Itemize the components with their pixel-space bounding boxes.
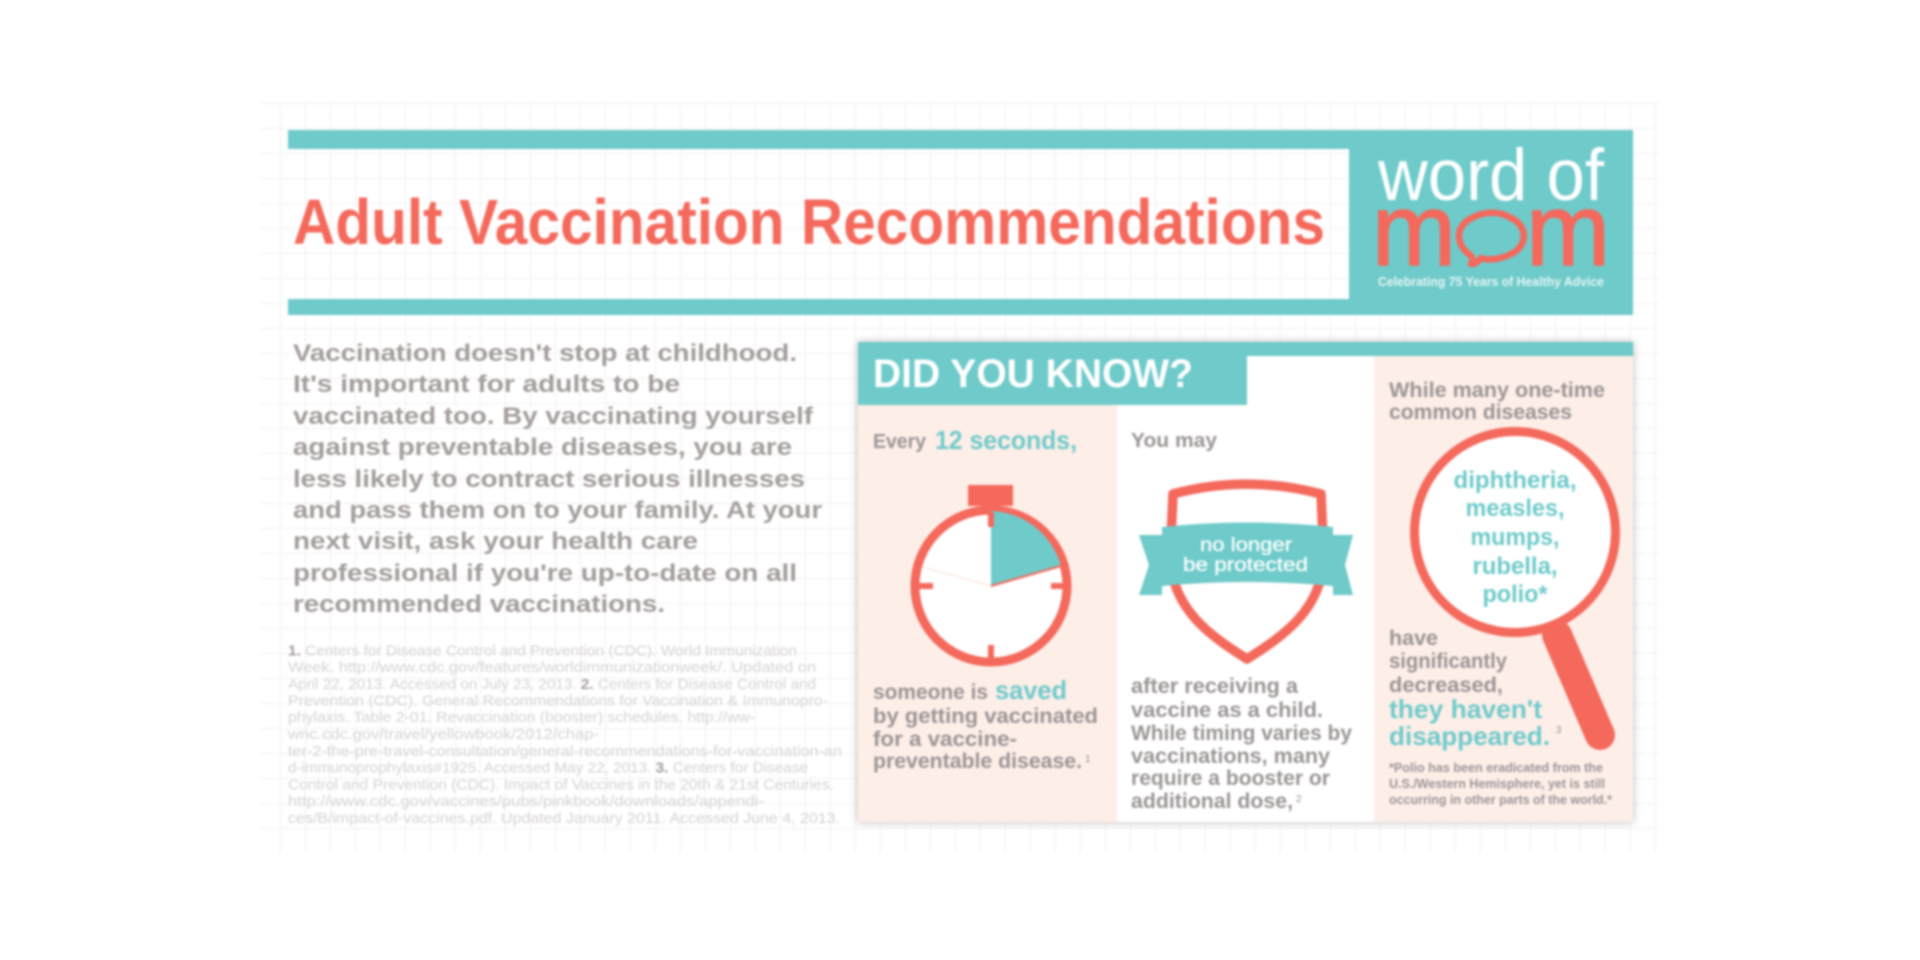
- column: diseases: have: [1389, 627, 1438, 650]
- column: diseases: they haven't: [1389, 694, 1542, 724]
- column: 12 seconds: someone is: [873, 681, 988, 704]
- column: 12 seconds: [858, 405, 1117, 822]
- header band: [288, 130, 1633, 315]
- logo: word of mom: [1372, 135, 1610, 289]
- column: booster: 2: [1296, 794, 1302, 805]
- intro paragraph: less likely to contract serious illnesses: [293, 466, 805, 493]
- references: ter-2-the-pre-travel-consultation/general-recommendations-for-vaccination-an: [288, 744, 842, 760]
- column: booster: require a booster or: [1131, 767, 1330, 790]
- column: 12 seconds: preventable disease.: [873, 750, 1082, 773]
- column: 12 seconds: saved: [995, 675, 1067, 705]
- logo: word of mom: Celebrating 75 Years of Healthy Advice: [1378, 275, 1604, 289]
- column: booster: While timing varies by: [1131, 722, 1352, 745]
- references: ces/B/impact-of-vaccines.pdf. Updated January 2011. Accessed June 4, 2013.: [288, 811, 840, 827]
- icon: magnifying glass: measles,: [1466, 495, 1564, 522]
- column: diseases: While many one-time: [1389, 379, 1605, 402]
- icon: magnifying glass: rubella,: [1472, 553, 1558, 580]
- intro paragraph: vaccinated too. By vaccinating yourself: [293, 403, 814, 430]
- icon: magnifying glass: polio*: [1482, 581, 1548, 608]
- logo: word of mom: m: [1372, 173, 1456, 287]
- references: http://www.cdc.gov/vaccines/pubs/pinkbook/downloads/appendi-: [288, 794, 764, 810]
- icon: shield with ribbon: be protected: [1183, 555, 1308, 576]
- intro paragraph: recommended vaccinations.: [293, 591, 665, 618]
- title: Adult Vaccination Recommendations: [293, 186, 1325, 258]
- column: booster: vaccine as a child.: [1131, 699, 1323, 722]
- references: wnc.cdc.gov/travel/yellowbook/2012/chap-: [287, 727, 599, 743]
- references: Week. http://www.cdc.gov/features/worldimmunizationweek/. Updated on: [288, 660, 816, 676]
- column: booster: additional dose,: [1131, 790, 1293, 813]
- references: April 22, 2013. Accessed on July 23, 2013. 2. Centers for Disease Control and: [288, 677, 816, 693]
- intro paragraph: against preventable diseases, you are: [293, 434, 792, 461]
- column: booster: You may: [1131, 430, 1218, 452]
- heading tab: [858, 342, 1633, 405]
- panel: did you know: [858, 342, 1633, 822]
- icon: shield with ribbon: no longer: [1200, 535, 1293, 556]
- icon: magnifying glass: mumps,: [1470, 524, 1560, 551]
- column: diseases: common diseases: [1389, 401, 1572, 424]
- logo: word of mom: m: [1526, 173, 1610, 287]
- references: [287, 644, 842, 827]
- column: booster: after receiving a: [1131, 675, 1298, 698]
- column: diseases: decreased,: [1389, 674, 1503, 697]
- column: diseases: [1374, 356, 1633, 822]
- column: 12 seconds: 12 seconds,: [935, 425, 1077, 455]
- column: 12 seconds: 1: [1085, 754, 1091, 765]
- intro paragraph: and pass them on to your family. At your: [293, 497, 822, 524]
- icon: stopwatch: [915, 485, 1070, 662]
- references: d-immunoprophylaxis#1925. Accessed May 22, 2013. 3. Centers for Disease: [288, 760, 808, 776]
- icon: magnifying glass: [1414, 432, 1616, 735]
- intro paragraph: It's important for adults to be: [293, 371, 680, 398]
- heading tab: DID YOU KNOW?: [873, 352, 1193, 396]
- column: diseases: *Polio has been eradicated from the: [1389, 761, 1603, 775]
- column: 12 seconds: Every: [873, 431, 927, 453]
- column: 12 seconds: by getting vaccinated: [873, 705, 1098, 728]
- column: diseases: disappeared.: [1389, 721, 1550, 751]
- references: Prevention (CDC). General Recommendations for Vaccination & Immunopro-: [288, 694, 828, 710]
- references: phylaxis. Table 2-01. Revaccination (booster) schedules. http://ww-: [288, 710, 755, 726]
- column: diseases: U.S./Western Hemisphere, yet is still: [1389, 777, 1605, 791]
- logo: word of mom: word of: [1377, 135, 1605, 216]
- intro paragraph: next visit, ask your health care: [293, 528, 698, 555]
- references: 1. Centers for Disease Control and Prevention (CDC). World Immunization: [288, 644, 797, 660]
- column: diseases: occurring in other parts of the world.*: [1389, 793, 1612, 807]
- column: booster: [1131, 430, 1353, 813]
- column: diseases: 3: [1556, 725, 1562, 736]
- column: diseases: significantly: [1389, 650, 1507, 673]
- column: booster: vaccinations, many: [1131, 745, 1330, 768]
- icon: magnifying glass: diphtheria,: [1454, 467, 1576, 494]
- intro paragraph: Vaccination doesn't stop at childhood.: [293, 340, 797, 367]
- column: 12 seconds: for a vaccine-: [873, 728, 1017, 751]
- intro paragraph: professional if you're up-to-date on all: [293, 560, 797, 587]
- icon: shield with ribbon: [1139, 484, 1353, 659]
- references: Control and Prevention (CDC). Impact of Vaccines in the 20th & 21st Centuries.: [288, 778, 834, 794]
- intro paragraph: [293, 340, 822, 618]
